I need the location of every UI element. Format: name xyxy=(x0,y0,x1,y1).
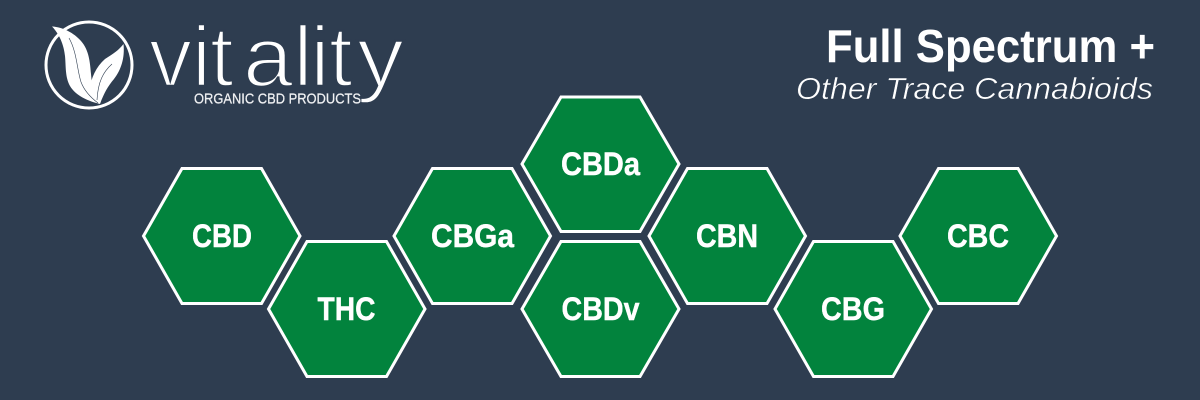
wordmark: vitality: v xyxy=(149,10,193,105)
hexagon: THC xyxy=(268,242,425,376)
wordmark: vitality: l xyxy=(294,10,312,105)
hexagon: CBN: CBN xyxy=(696,218,758,254)
wordmark: vitality xyxy=(149,10,405,105)
wordmark: vitality: t xyxy=(329,10,353,105)
hexagon: CBC xyxy=(900,168,1056,304)
logo: Vitality Organic CBD Products xyxy=(46,10,405,108)
hexagon: CBDa: CBDa xyxy=(561,146,640,182)
title: Full Spectrum +: Full Spectrum + xyxy=(826,20,1155,72)
hexagon: CBGa xyxy=(394,168,550,304)
hexagon: CBG xyxy=(775,242,932,376)
tagline: ORGANIC CBD PRODUCTS xyxy=(194,92,361,108)
wordmark: vitality: t xyxy=(210,10,234,105)
wordmark: vitality: i xyxy=(310,10,329,105)
hexagon: CBG: CBG xyxy=(821,291,885,327)
hexagon: CBN xyxy=(649,168,806,304)
subtitle: Other Trace Cannabioids: Other Trace Cannabioids xyxy=(796,71,1153,106)
hexagon: CBDa xyxy=(522,97,679,232)
hexagon: CBDv: CBDv xyxy=(562,291,640,327)
icon: circle with leaves xyxy=(46,22,132,108)
hexagon: CBD: CBD xyxy=(192,218,252,254)
hexagon: CBGa: CBGa xyxy=(431,218,514,254)
wordmark: vitality: y xyxy=(357,10,405,105)
hexagon: CBD xyxy=(144,168,300,304)
hexagon: CBC: CBC xyxy=(947,218,1009,254)
hexagon: THC: THC xyxy=(318,291,376,327)
heading xyxy=(796,20,1155,106)
hexagon: CBDv xyxy=(522,242,679,376)
wordmark: vitality: a xyxy=(243,10,294,105)
wordmark: vitality: i xyxy=(192,10,211,105)
